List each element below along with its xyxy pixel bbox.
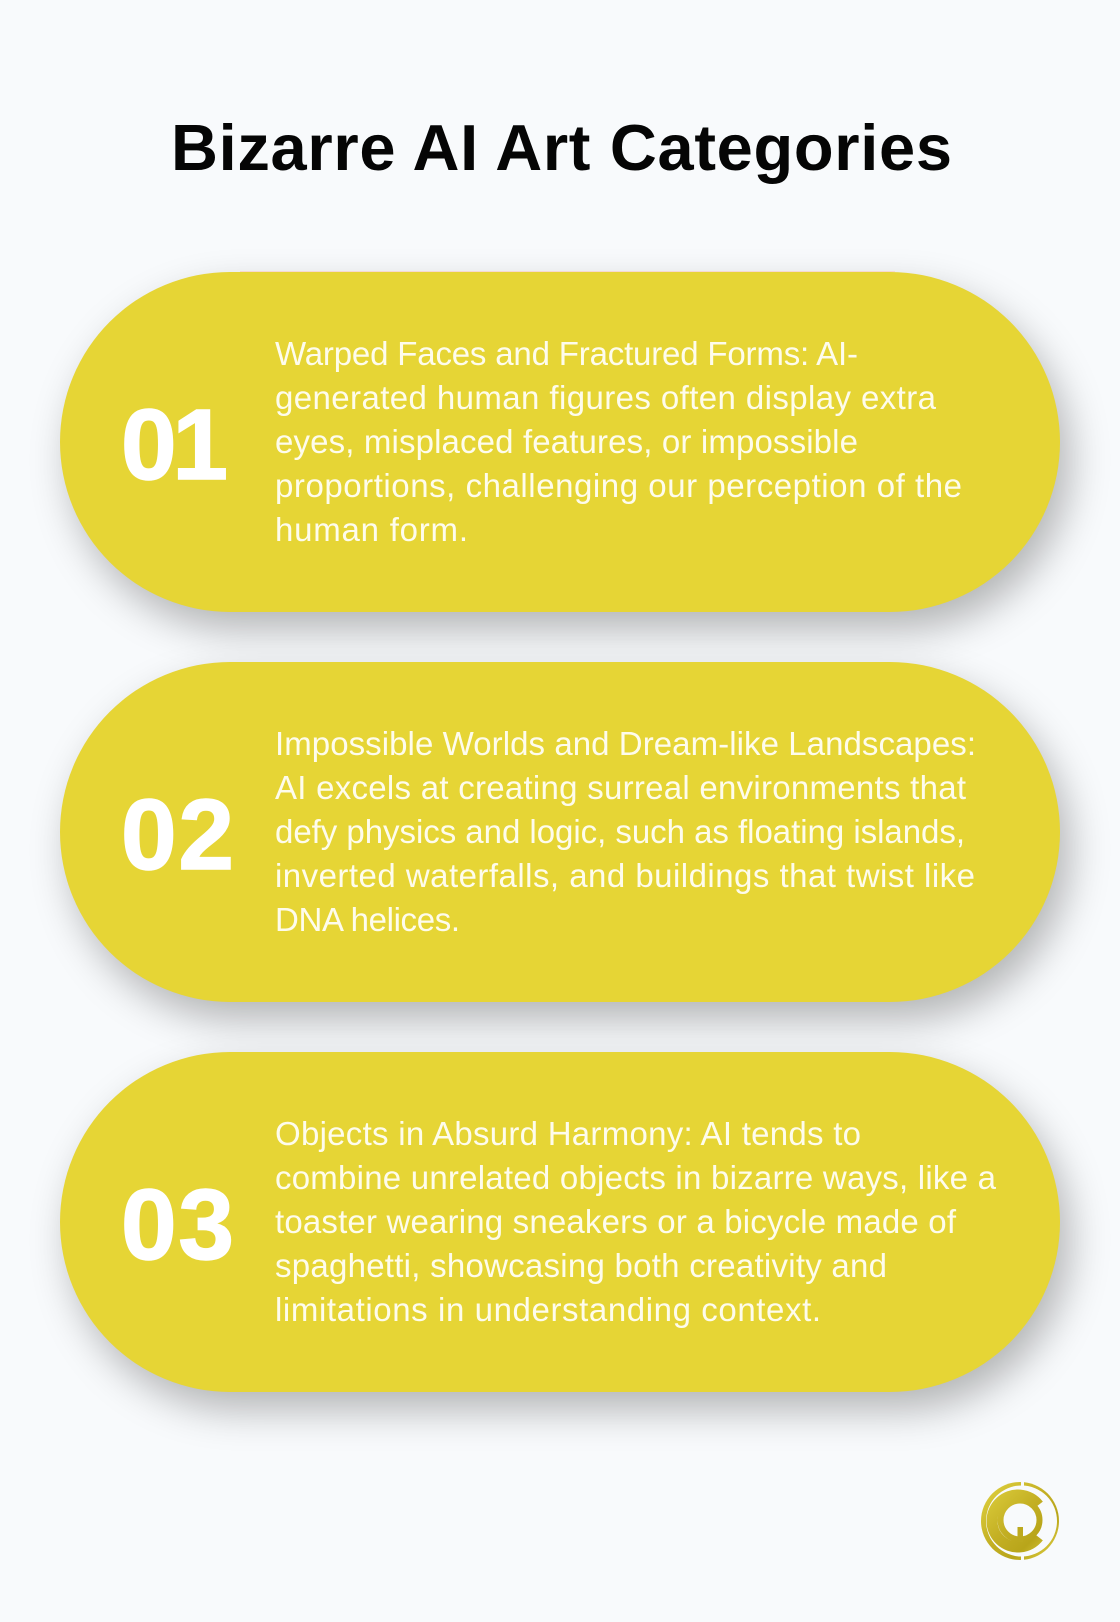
panel: category 02 — [60, 662, 1060, 1002]
description 03: Objects in Absurd Harmony: AI tends to — [275, 1115, 861, 1152]
icon: gold logo — [981, 1482, 1059, 1560]
description 02: Impossible Worlds and Dream-like Landscapes: — [275, 725, 976, 762]
number 01: 01 — [121, 389, 228, 501]
number 03: 03 — [121, 1169, 234, 1281]
description 02: inverted waterfalls, and buildings that twist like — [275, 857, 975, 894]
description 02: DNA helices. — [275, 901, 460, 938]
description 01 — [275, 335, 962, 548]
description 03: toaster wearing sneakers or a bicycle made of — [275, 1203, 957, 1240]
description 03: combine unrelated objects in bizarre ways, like a — [275, 1159, 997, 1196]
description 03: limitations in understanding context. — [275, 1291, 821, 1328]
panel: category 01 — [60, 272, 1060, 612]
description 01: proportions, challenging our perception of the — [275, 467, 962, 504]
description 01: eyes, misplaced features, or impossible — [275, 423, 858, 460]
description 03: spaghetti, showcasing both creativity and — [275, 1247, 887, 1284]
description 01: generated human figures often display extra — [275, 379, 937, 416]
description 01: human form. — [275, 511, 468, 548]
description 03 — [275, 1115, 997, 1328]
description 02 — [275, 725, 976, 938]
number 02: 02 — [121, 779, 234, 891]
title: Bizarre AI Art Categories — [171, 111, 952, 184]
description 02: AI excels at creating surreal environments that — [275, 769, 966, 806]
description 01: Warped Faces and Fractured Forms: AI- — [275, 335, 858, 372]
panel: category 03 — [60, 1052, 1060, 1392]
description 02: defy physics and logic, such as floating islands, — [275, 813, 965, 850]
